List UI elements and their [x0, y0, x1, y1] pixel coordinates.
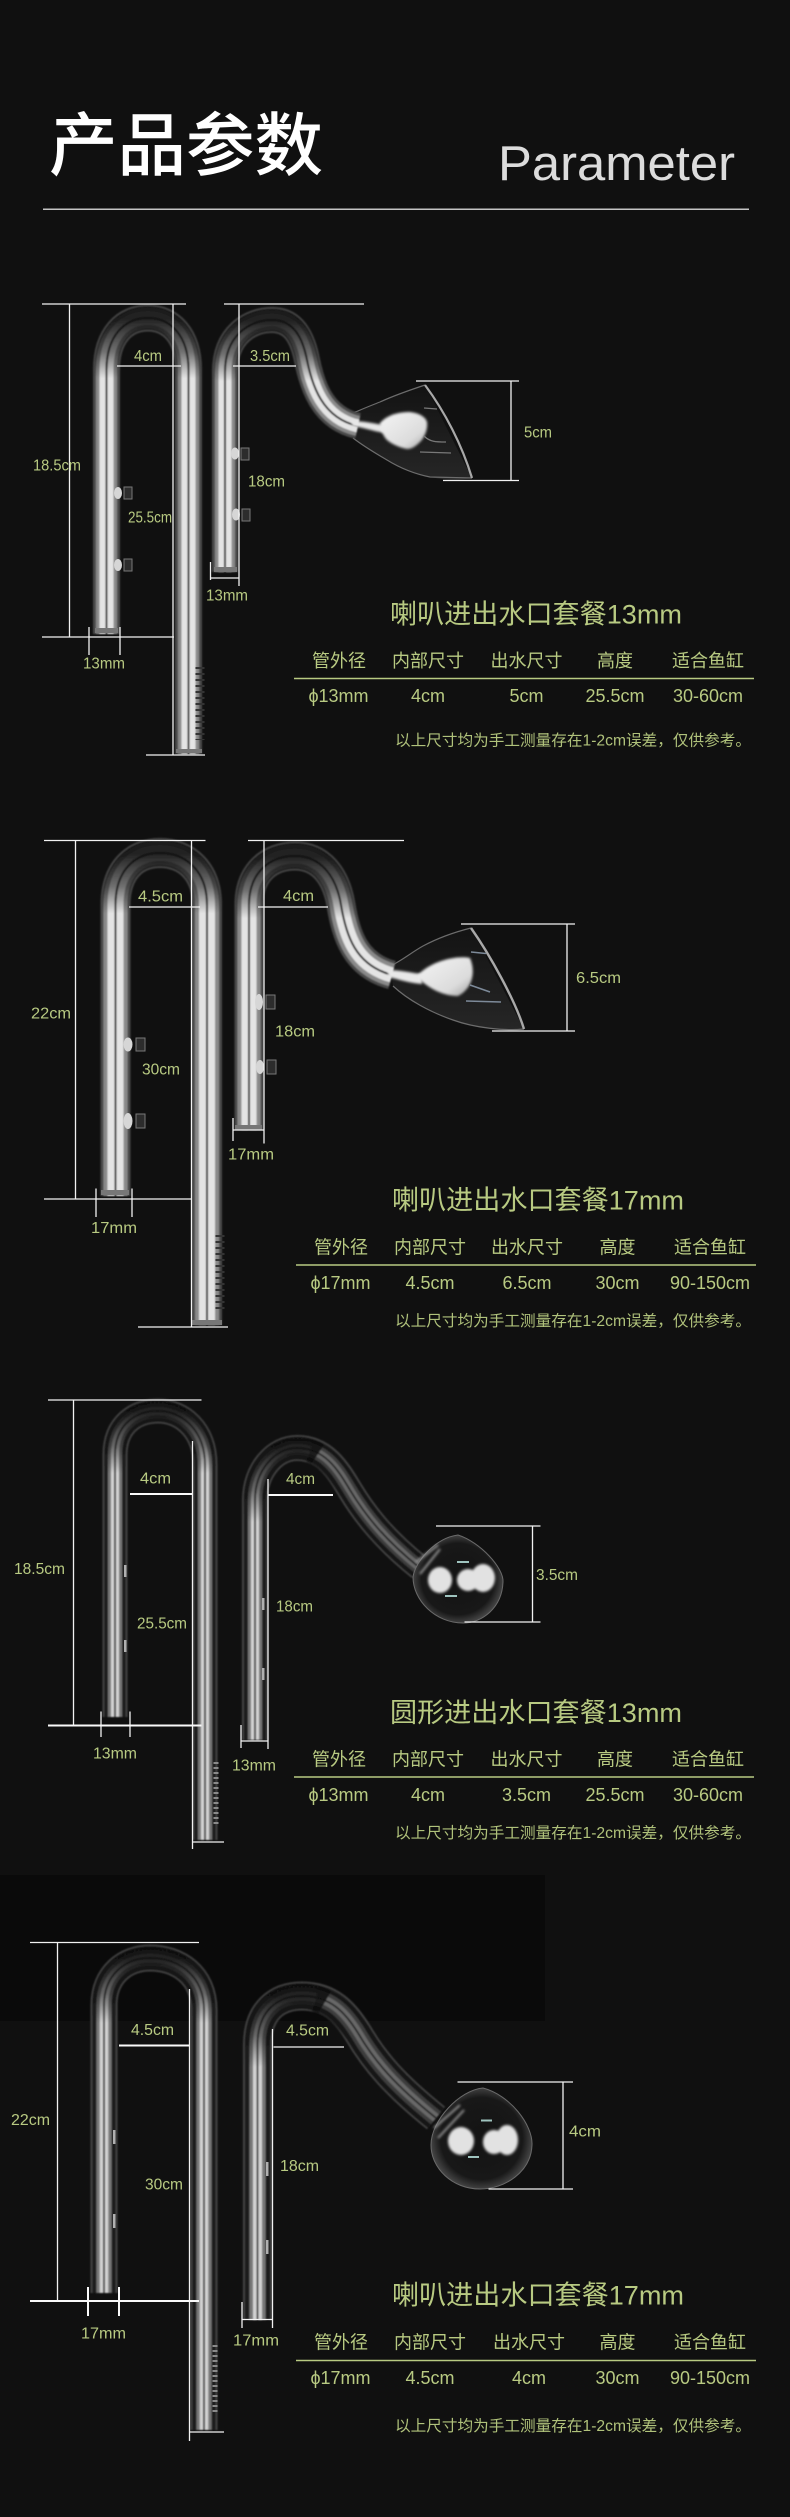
dimension labels: 13mm — [83, 656, 125, 672]
dimension labels: 4cm — [286, 1471, 315, 1488]
spec table: 25.5cm — [585, 1785, 645, 1805]
dimension labels: 30cm — [145, 2176, 183, 2194]
spec table: 管外径 — [312, 1750, 366, 1770]
spec table: 出水尺寸 — [490, 1750, 562, 1770]
spec table: 适合鱼缸 — [672, 1748, 744, 1770]
dimension labels: 4cm — [283, 888, 314, 905]
dimension lines — [42, 304, 519, 755]
spec table: 管外径 — [314, 2332, 368, 2352]
spec table: 30-60cm — [673, 1785, 743, 1805]
dimension labels: 4cm — [140, 1470, 171, 1488]
spec table: 4cm — [411, 686, 445, 706]
icon: U-shaped inflow pipe — [95, 318, 202, 754]
dimension labels: 30cm — [142, 1062, 180, 1078]
dimension labels: 4cm — [134, 348, 162, 365]
dimension labels — [11, 2022, 601, 2350]
spec table: 高度 — [600, 2332, 636, 2352]
dimension labels: 13mm — [206, 588, 248, 604]
dimension labels: 4.5cm — [138, 888, 183, 906]
spec table: 出水尺寸 — [491, 1238, 563, 1258]
note: 以上尺寸均为手工测量存在1-2cm误差，仅供参考。 — [395, 2417, 751, 2435]
spec table: 内部尺寸 — [394, 1238, 466, 1258]
icon: U-shaped inflow pipe — [115, 1411, 216, 1840]
spec table: 4.5cm — [405, 2368, 455, 2388]
dimension lines — [30, 1942, 573, 2441]
note: 以上尺寸均为手工测量存在1-2cm误差，仅供参考。 — [395, 732, 751, 750]
subtitle: Parameter: Parameter — [498, 137, 735, 191]
dimension lines — [48, 1400, 540, 1849]
icon: U-shaped inflow pipe — [101, 853, 222, 1325]
icon: S-shaped outflow pipe with trumpet — [214, 320, 472, 572]
spec table: 管外径 — [312, 651, 366, 671]
note: 以上尺寸均为手工测量存在1-2cm误差，仅供参考。 — [395, 1312, 751, 1330]
spec table: 4cm — [512, 2368, 546, 2388]
dimension labels: 18cm — [275, 1024, 315, 1040]
dimension labels: 13mm — [93, 1746, 137, 1762]
spec table: 90-150cm — [670, 1273, 750, 1293]
spec table: 30cm — [595, 1273, 640, 1293]
panel: round set 17mm — [11, 1942, 756, 2441]
spec table: 90-150cm — [670, 2368, 750, 2388]
spec table: 出水尺寸 — [493, 2332, 565, 2352]
heading: 喇叭进出水口套餐17mm — [392, 1186, 684, 1216]
dimension labels: 18cm — [280, 2158, 319, 2175]
spec table: 高度 — [597, 651, 633, 671]
dimension labels: 18cm — [248, 474, 285, 490]
spec table: 内部尺寸 — [394, 2332, 466, 2352]
spec table: 适合鱼缸 — [674, 2332, 746, 2352]
spec table: 高度 — [600, 1238, 636, 1258]
dimension labels: 17mm — [228, 1146, 274, 1164]
spec table: 出水尺寸 — [490, 651, 562, 671]
spec table: 适合鱼缸 — [674, 1236, 746, 1258]
dimension labels: 4cm — [569, 2124, 601, 2140]
dimension labels — [14, 1470, 578, 1774]
note: 以上尺寸均为手工测量存在1-2cm误差，仅供参考。 — [395, 1824, 751, 1842]
heading: 喇叭进出水口套餐17mm — [392, 2280, 684, 2310]
spec table: 6.5cm — [502, 1273, 552, 1293]
dimension labels: 22cm — [31, 1006, 71, 1022]
spec table: ϕ17mm — [310, 2368, 371, 2388]
spec table: 管外径 — [314, 1238, 368, 1258]
spec table: 内部尺寸 — [392, 1750, 464, 1770]
dimension labels: 13mm — [232, 1758, 276, 1774]
dimension labels: 4.5cm — [286, 2022, 329, 2040]
dimension labels: 18cm — [276, 1598, 313, 1616]
spec table — [294, 650, 754, 706]
dimension labels: 4.5cm — [131, 2022, 174, 2039]
dimension labels: 17mm — [91, 1220, 137, 1237]
spec table: ϕ13mm — [308, 1785, 369, 1805]
spec table: 30-60cm — [673, 686, 743, 706]
heading: 圆形进出水口套餐13mm — [390, 1698, 682, 1728]
panel: trumpet set 13mm — [33, 304, 754, 755]
spec table — [294, 1748, 754, 1805]
dimension labels — [31, 888, 621, 1237]
dimension labels: 25.5cm — [128, 510, 172, 526]
spec table: ϕ13mm — [308, 686, 369, 706]
dimension labels: 5cm — [524, 424, 552, 442]
spec table: 3.5cm — [502, 1785, 551, 1805]
dimension labels: 3.5cm — [536, 1567, 578, 1584]
dimension labels: 17mm — [233, 2332, 279, 2350]
dimension labels — [33, 348, 552, 672]
spec table: 4cm — [411, 1785, 445, 1805]
dimension labels: 18.5cm — [14, 1561, 65, 1578]
spec table: 内部尺寸 — [392, 651, 464, 671]
heading: 喇叭进出水口套餐13mm — [390, 600, 682, 630]
dimension labels: 17mm — [81, 2326, 126, 2342]
icon: U-shaped inflow pipe — [104, 1958, 215, 2430]
spec table: ϕ17mm — [310, 1273, 371, 1293]
spec table: 30cm — [595, 2368, 640, 2388]
spec table: 高度 — [597, 1750, 633, 1770]
panel: round set 13mm — [14, 1400, 754, 1849]
title: 产品参数 — [49, 108, 323, 184]
spec table: 25.5cm — [585, 686, 645, 706]
dimension labels: 25.5cm — [137, 1616, 187, 1632]
dimension labels: 3.5cm — [250, 348, 290, 365]
dimension labels: 18.5cm — [33, 458, 81, 474]
dimension labels: 6.5cm — [576, 970, 621, 987]
spec table: 4.5cm — [405, 1273, 455, 1293]
spec table — [296, 1236, 756, 1293]
icon: S-shaped outflow pipe with round head — [255, 1448, 503, 1740]
panel: trumpet set 17mm — [31, 840, 756, 1330]
dimension lines — [44, 840, 575, 1327]
dimension labels: 22cm — [11, 2112, 50, 2129]
icon: S-shaped outflow pipe with round head — [258, 1996, 532, 2320]
spec table: 适合鱼缸 — [672, 650, 744, 671]
icon: S-shaped outflow pipe with trumpet — [235, 856, 524, 1130]
spec table: 5cm — [509, 686, 544, 706]
spec table — [296, 2332, 756, 2388]
